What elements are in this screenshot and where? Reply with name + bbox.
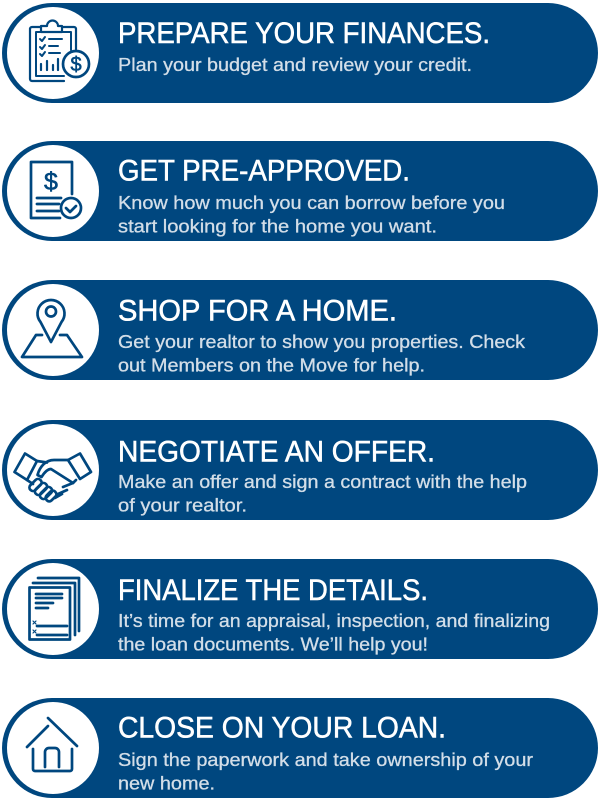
panel: get pre-approved: start looking for the home you want. [118, 216, 437, 237]
heading: SHOP FOR A HOME. [118, 295, 397, 328]
panel: shop for a home: out Members on the Move for help. [118, 355, 425, 376]
heading: NEGOTIATE AN OFFER. [118, 436, 435, 468]
panel: prepare your finances [2, 3, 598, 103]
icon: map pin [22, 300, 82, 357]
panel: negotiate an offer: of your realtor. [118, 495, 247, 516]
panel: finalize the details: the loan documents. We’ll help you! [118, 634, 428, 655]
icon: stack of documents [30, 578, 79, 640]
heading: GET PRE-APPROVED. [118, 154, 410, 188]
panel: negotiate an offer [2, 420, 598, 520]
text block: Know how much you can borrow before you [118, 192, 505, 213]
text block: Plan your budget and review your credit. [118, 54, 472, 75]
text block: Make an offer and sign a contract with the help [118, 471, 527, 492]
heading: CLOSE ON YOUR LOAN. [118, 712, 446, 745]
text block: Get your realtor to show you properties. Check [118, 331, 526, 352]
text block: Sign the paperwork and take ownership of your [118, 749, 533, 770]
heading: PREPARE YOUR FINANCES. [118, 17, 490, 50]
icon: document with dollar and check: $ [44, 168, 58, 196]
panel: close on your loan [2, 698, 598, 798]
icon: clipboard with chart and dollar coin: $ [70, 54, 82, 76]
text block: It’s time for an appraisal, inspection, and finalizing [118, 610, 550, 631]
heading: FINALIZE THE DETAILS. [118, 574, 428, 607]
icon: handshake [14, 454, 91, 503]
panel: shop for a home [2, 280, 598, 380]
panel: get pre-approved [2, 141, 598, 241]
panel: finalize the details [2, 559, 598, 659]
icon: document with dollar and check [31, 162, 81, 218]
icon: house [27, 718, 77, 771]
icon: clipboard with chart and dollar coin [30, 21, 89, 81]
panel: close on your loan: new home. [118, 772, 215, 794]
